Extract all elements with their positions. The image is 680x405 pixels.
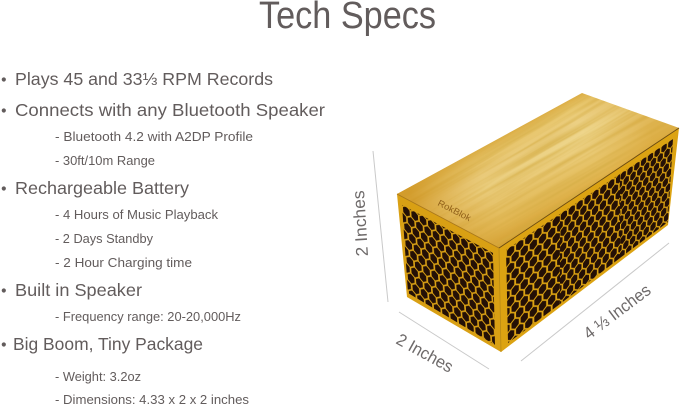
left honeycomb face bbox=[397, 194, 501, 352]
dimension: height: 2 Inches bbox=[349, 190, 372, 257]
bullet: speaker: Built in Speaker bbox=[15, 280, 142, 300]
detail: range: - 30ft/10m Range bbox=[55, 154, 155, 168]
dimension: depth bbox=[393, 312, 489, 377]
bullet: plays records: Plays 45 and 33⅓ RPM Records bbox=[15, 69, 273, 89]
dimension: depth: 2 Inches bbox=[393, 330, 456, 377]
detail: weight: - Weight: 3.2oz bbox=[55, 370, 141, 384]
spec list bbox=[2, 69, 325, 405]
bullet: battery: Rechargeable Battery bbox=[15, 178, 189, 198]
detail: standby: - 2 Days Standby bbox=[55, 232, 154, 246]
logo: RokBlok bbox=[436, 198, 473, 223]
dimension: height bbox=[349, 151, 388, 302]
bullet: bluetooth speaker: Connects with any Bluetooth Speaker bbox=[15, 100, 325, 120]
product: speaker box bbox=[396, 93, 680, 352]
dimension: length: 4 ⅓ Inches bbox=[580, 280, 654, 343]
detail: bluetooth profile: - Bluetooth 4.2 with A2DP Profile bbox=[55, 130, 253, 144]
bullet: package: Big Boom, Tiny Package bbox=[13, 334, 203, 354]
detail: charging: - 2 Hour Charging time bbox=[55, 256, 192, 270]
top wood panel bbox=[396, 93, 680, 248]
detail: playback: - 4 Hours of Music Playback bbox=[55, 208, 219, 222]
dimension: length bbox=[521, 243, 669, 361]
detail: frequency: - Frequency range: 20-20,000Hz bbox=[55, 310, 241, 324]
right honeycomb face bbox=[499, 128, 679, 352]
